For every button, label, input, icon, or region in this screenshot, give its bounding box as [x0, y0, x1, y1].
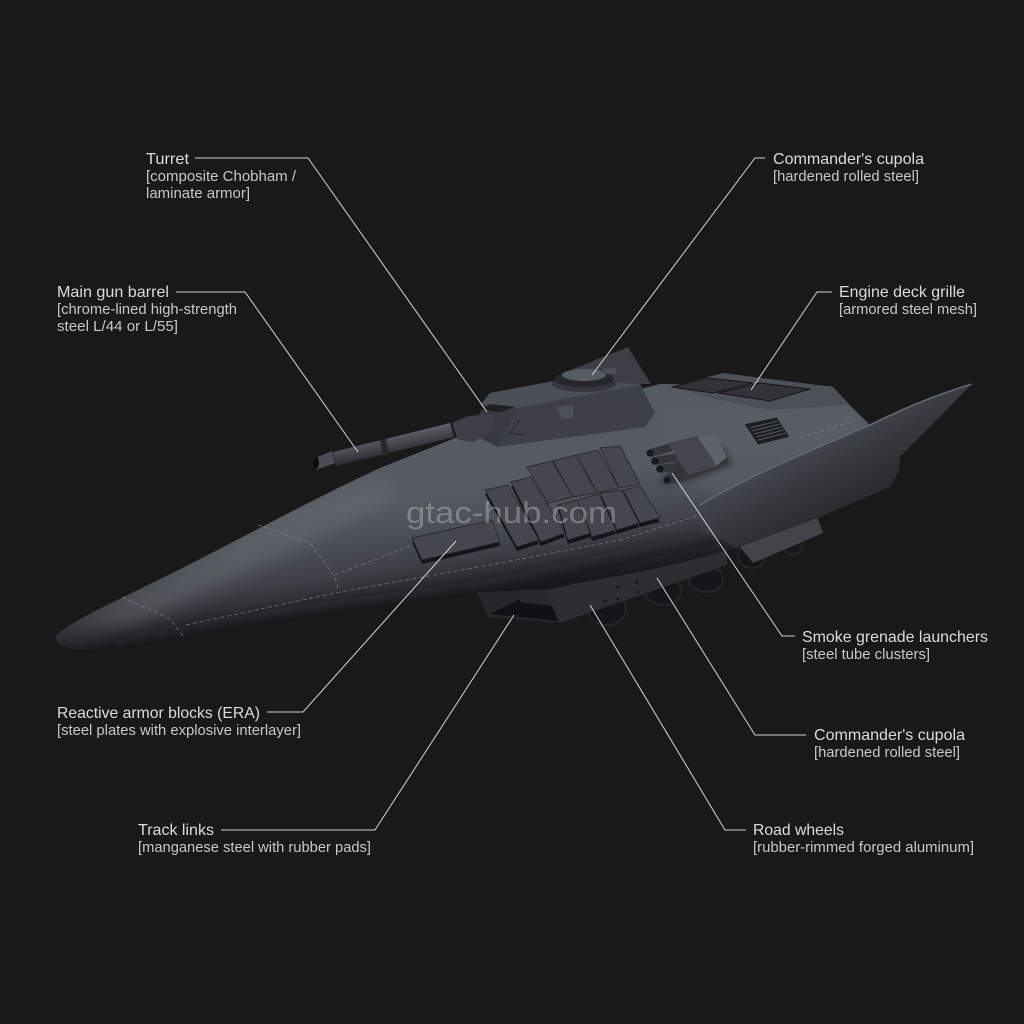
callout: main gun barrel: steel L/44 or L/55] — [57, 318, 178, 335]
smoke grenade launchers — [646, 436, 732, 484]
callout: track links — [138, 615, 514, 856]
callout: turret: laminate armor] — [146, 185, 250, 202]
rear fin behind cupola — [560, 347, 651, 384]
lower left skirt box — [477, 590, 560, 623]
callout: commander's cupola (top): [hardened rolled steel] — [773, 168, 919, 185]
callout: main gun barrel: [chrome-lined high-strength — [57, 301, 237, 318]
callout: commander's cupola (lower): [hardened rolled steel] — [814, 744, 960, 761]
callout: engine deck grille: Engine deck grille — [839, 284, 965, 301]
callout: track links: [manganese steel with rubber pads] — [138, 839, 371, 856]
main hull — [56, 384, 900, 650]
callout: track links: Track links — [138, 822, 214, 839]
commander's cupola — [552, 368, 616, 392]
callout: reactive armor blocks: [steel plates with explosive interlayer] — [57, 722, 301, 739]
callout: commander's cupola (top) — [592, 151, 924, 375]
callout: road wheels — [590, 605, 974, 856]
engine deck grille — [672, 378, 810, 401]
rear skirt plate — [740, 517, 823, 563]
callout: turret — [146, 151, 487, 412]
callout: reactive armor blocks: Reactive armor blocks (ERA) — [57, 705, 260, 722]
side skirt with rivets — [520, 550, 727, 623]
callout: road wheels: Road wheels — [753, 822, 844, 839]
infographic canvas — [56, 152, 988, 855]
callout: turret: [composite Chobham / — [146, 168, 297, 185]
callout: smoke grenade launchers: [steel tube clusters] — [802, 646, 930, 663]
callout: engine deck grille — [751, 284, 977, 390]
callout: road wheels: [rubber-rimmed forged aluminum] — [753, 839, 974, 856]
side vent — [744, 417, 790, 445]
callout: engine deck grille: [armored steel mesh] — [839, 301, 977, 318]
engine deck — [670, 373, 850, 410]
tail fin — [700, 384, 972, 548]
callout: commander's cupola (lower): Commander's cupola — [814, 727, 965, 744]
callout: commander's cupola (lower) — [657, 578, 965, 761]
main gun — [313, 414, 496, 470]
callout: smoke grenade launchers: Smoke grenade launchers — [802, 629, 988, 646]
callout: main gun barrel: Main gun barrel — [57, 284, 169, 301]
callout: commander's cupola (top): Commander's cupola — [773, 151, 924, 168]
road wheels — [588, 542, 802, 625]
watermark: gtac-hub.com — [406, 495, 617, 530]
tank illustration — [56, 347, 972, 650]
callout: main gun barrel — [57, 284, 358, 452]
callout: smoke grenade launchers — [672, 473, 988, 663]
panel seam lines — [122, 420, 855, 636]
turret — [470, 380, 655, 447]
reactive armor blocks — [412, 446, 660, 564]
callout: reactive armor blocks — [57, 541, 456, 739]
callout: turret: Turret — [146, 151, 190, 168]
